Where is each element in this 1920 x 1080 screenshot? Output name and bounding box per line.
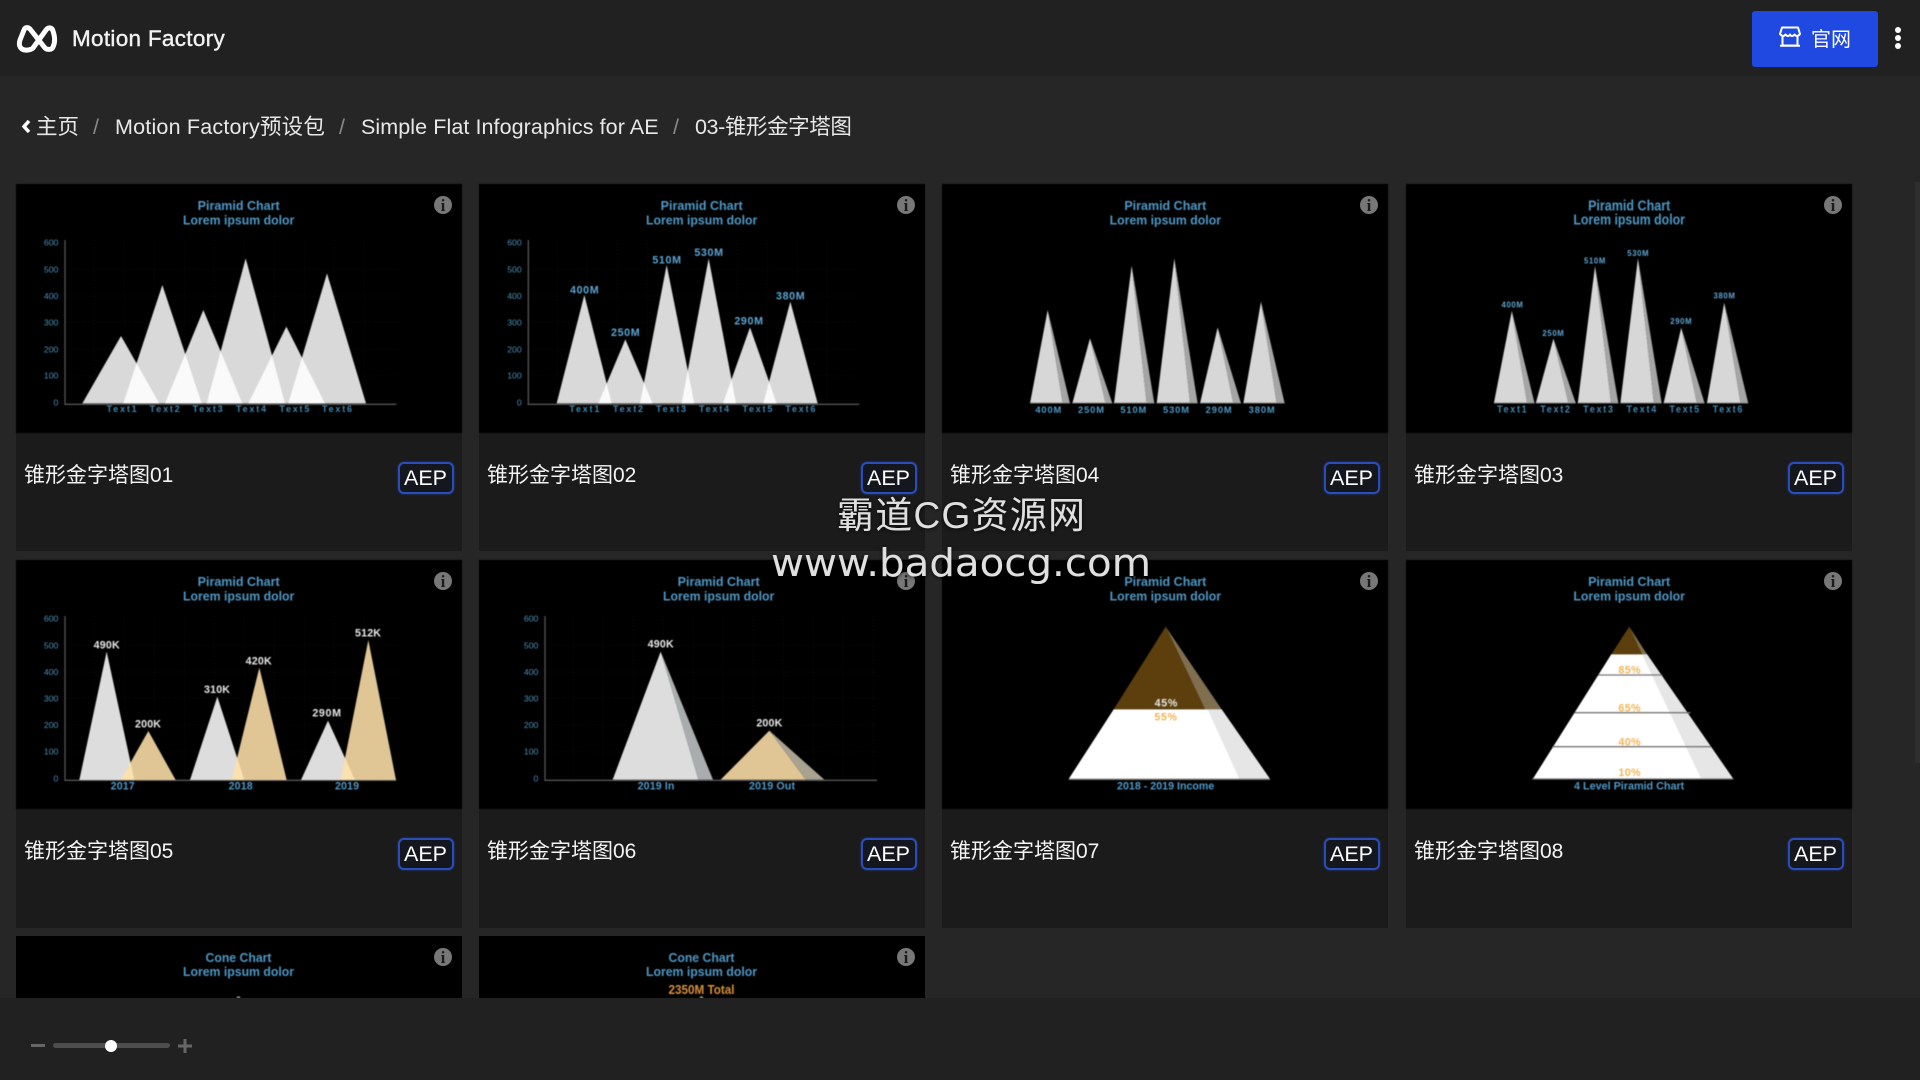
- chart: cones with values above and categories below: Text5: [1669, 403, 1699, 414]
- chart: overlapping pyramid chart 01: Piramid Chart: [198, 198, 280, 213]
- panel: card 04: [942, 184, 1388, 551]
- chart: two shaded pyramids: 490K: [648, 638, 674, 650]
- footer bar with zoom slider: [0, 998, 1920, 1080]
- chart: four-level pyramid: 10%: [1618, 767, 1641, 779]
- chart: two shaded pyramids: Piramid Chart: [678, 574, 760, 589]
- chart: paired pyramid chart by year: 200K: [135, 718, 161, 730]
- icon: back chevron: [22, 120, 30, 133]
- chart: overlapping pyramid chart 01: 500: [44, 264, 59, 274]
- badge: AEP: [1324, 462, 1380, 494]
- chart: paired pyramid chart by year: Lorem ipsum dolor: [183, 588, 294, 603]
- chart: pyramid chart 02 with values: 0: [517, 397, 522, 407]
- chart: cone chart heading with total: [646, 950, 758, 998]
- chart: pyramid chart 02 with values: 400M: [570, 284, 599, 296]
- chart: two-level pyramid income: [942, 560, 1388, 809]
- chart: two-level pyramid income: 2018 - 2019 Income: [1117, 780, 1214, 792]
- badge: AEP: [860, 838, 916, 870]
- chart: cones with values below: 510M: [1120, 405, 1147, 415]
- chart: overlapping pyramid chart 01: Text1: [107, 404, 137, 414]
- chart: pyramid chart 02 with values: 530M: [694, 247, 723, 259]
- chart: cone chart heading: Lorem ipsum dolor: [183, 964, 294, 979]
- separator: /: [93, 115, 99, 139]
- chart: paired pyramid chart by year: 2019: [335, 780, 359, 792]
- chart: overlapping pyramid chart 01: Text5: [279, 404, 309, 414]
- chart: cones with values above and categories below: Text6: [1713, 403, 1742, 414]
- chart: cones with values above and categories below: 250M: [1542, 329, 1564, 338]
- chart: cones with values below: 290M: [1206, 405, 1232, 415]
- badge: AEP: [860, 462, 916, 494]
- chart: two shaded pyramids: 200K: [756, 717, 783, 729]
- chart: paired pyramid chart by year: 290M: [312, 707, 341, 719]
- chart: overlapping pyramid chart 01: Text3: [193, 404, 223, 414]
- chart: cones with values above and categories below: Text3: [1583, 403, 1613, 414]
- crumb: infographics: Simple Flat Infographics for AE: [361, 115, 659, 139]
- card title: 锥形金字塔图07: [950, 840, 1099, 863]
- badge: AEP: [1788, 838, 1844, 870]
- panel: card 02: [479, 184, 925, 551]
- chart: two-level pyramid income: Lorem ipsum dolor: [1110, 588, 1221, 603]
- slider thumb: [105, 1040, 117, 1052]
- chart: two-level pyramid income: 55%: [1154, 711, 1178, 723]
- panel: card 10 (clipped): [479, 936, 925, 998]
- panel: card 09 (clipped): [16, 936, 462, 998]
- button label: 官网: [1811, 29, 1851, 51]
- chart: cones with values above and categories below: 290M: [1670, 317, 1692, 326]
- chart: four-level pyramid: 4 Level Piramid Chart: [1574, 780, 1685, 792]
- card title: 锥形金字塔图08: [1414, 840, 1563, 863]
- chart: two-level pyramid income: 45%: [1155, 697, 1178, 709]
- chart: paired pyramid chart by year: 2017: [111, 780, 135, 792]
- chart: pyramid chart 02 with values: 600: [507, 238, 522, 248]
- badge: AEP: AEP: [867, 466, 910, 490]
- icon: minus: [31, 1044, 45, 1047]
- chart: two shaded pyramids: 2019 In: [638, 780, 674, 792]
- icon: info: [1824, 572, 1842, 590]
- chart: paired pyramid chart by year: 420K: [246, 655, 272, 667]
- chart: pyramid chart 02 with values: 380M: [776, 290, 805, 302]
- brand name: Motion Factory: [72, 26, 225, 51]
- chart: pyramid chart 02 with values: Text4: [699, 404, 729, 414]
- icon: info: [1360, 196, 1378, 214]
- chart: cones with values below: Piramid Chart: [1124, 198, 1207, 213]
- panel: card 06: [479, 560, 925, 928]
- chart: paired pyramid chart by year: 490K: [94, 640, 120, 652]
- chart: two shaded pyramids: 2019 Out: [749, 780, 795, 792]
- chart: overlapping pyramid chart 01: 400: [44, 291, 59, 301]
- badge: AEP: [1324, 838, 1380, 870]
- chart: paired pyramid chart by year: [16, 560, 462, 809]
- chart: cones with values above and categories below: Text1: [1497, 403, 1527, 414]
- chart: cones with values below: 250M: [1078, 405, 1104, 415]
- chart: two shaded pyramids: 100: [524, 747, 539, 757]
- icon: info: [897, 948, 915, 966]
- badge: AEP: AEP: [1330, 842, 1373, 866]
- chart: overlapping pyramid chart 01: Text2: [150, 404, 180, 414]
- badge: AEP: [398, 462, 454, 494]
- chart: four-level pyramid: Piramid Chart: [1588, 574, 1671, 589]
- chart: pyramid chart 02 with values: [479, 184, 925, 433]
- chart: cones with values below: 380M: [1249, 405, 1275, 415]
- chart: paired pyramid chart by year: 512K: [355, 628, 381, 640]
- card title: 锥形金字塔图06: [487, 840, 636, 863]
- chart: two shaded pyramids: 0: [534, 773, 539, 783]
- chart: pyramid chart 02 with values: 300: [507, 317, 522, 327]
- chart: cones with values above and categories below: 510M: [1584, 256, 1606, 265]
- chart: overlapping pyramid chart 01: 200: [44, 344, 59, 354]
- chart: pyramid chart 02 with values: 500: [507, 264, 522, 274]
- chart: pyramid chart 02 with values: Text2: [613, 404, 643, 414]
- chart: cones with values above and categories below: 400M: [1502, 300, 1523, 310]
- watermark: [771, 495, 1151, 585]
- crumb: current page: 03-锥形金字塔图: [695, 115, 851, 139]
- chart: four-level pyramid: 40%: [1618, 736, 1641, 748]
- chart: cones with values above and categories below: Lorem ipsum dolor: [1573, 211, 1685, 228]
- chart: cone chart heading with total: Lorem ipsum dolor: [646, 964, 757, 979]
- chart: four-level pyramid: [1406, 560, 1852, 809]
- card title: 锥形金字塔图04: [950, 464, 1099, 487]
- chart: pyramid chart 02 with values: Piramid Chart: [661, 198, 743, 213]
- chart: four-level pyramid: 85%: [1618, 664, 1641, 676]
- chart: paired pyramid chart by year: 310K: [204, 684, 230, 696]
- icon: plus: [178, 1039, 192, 1053]
- chart: two shaded pyramids: 600: [524, 614, 539, 624]
- icon: info: [1360, 572, 1378, 590]
- chart: pyramid chart 02 with values: Text5: [742, 404, 772, 414]
- panel: card 07: [942, 560, 1388, 928]
- chart: overlapping pyramid chart 01: Lorem ipsum dolor: [183, 212, 294, 227]
- scrollbar: [1915, 182, 1920, 763]
- separator: /: [673, 115, 679, 139]
- chart: cone chart heading: [183, 950, 295, 998]
- card title: 锥形金字塔图05: [24, 840, 173, 863]
- chart: two shaded pyramids: [479, 560, 925, 809]
- icon: Motion Factory logo: [16, 25, 58, 53]
- badge: AEP: AEP: [1330, 466, 1373, 490]
- header bar: [0, 0, 1920, 76]
- card title: 锥形金字塔图01: [24, 464, 173, 487]
- watermark: www.badaocg.com: [771, 541, 1151, 585]
- chart: cones with values above and categories below: 380M: [1714, 291, 1735, 301]
- chart: paired pyramid chart by year: 0: [54, 773, 59, 783]
- chart: cones with values above and categories below: Piramid Chart: [1588, 197, 1671, 214]
- icon: info: [897, 196, 915, 214]
- crumb: preset pack: Motion Factory预设包: [115, 115, 325, 139]
- chart: two shaded pyramids: 300: [524, 693, 539, 703]
- chart: cones with values below: 400M: [1035, 405, 1062, 415]
- chart: overlapping pyramid chart 01: 600: [44, 238, 59, 248]
- badge: AEP: AEP: [1794, 842, 1837, 866]
- crumb: home: 主页: [36, 115, 79, 139]
- chart: cones with values below: 530M: [1163, 405, 1189, 415]
- badge: AEP: AEP: [1794, 466, 1837, 490]
- chart: four-level pyramid: 65%: [1618, 702, 1641, 714]
- chart: paired pyramid chart by year: 300: [44, 693, 59, 703]
- badge: AEP: AEP: [404, 842, 447, 866]
- card title: 锥形金字塔图03: [1414, 464, 1563, 487]
- chart: four-level pyramid: Lorem ipsum dolor: [1573, 588, 1686, 603]
- chart: paired pyramid chart by year: 500: [44, 640, 59, 650]
- panel: card 08: [1406, 560, 1852, 928]
- chart: pyramid chart 02 with values: Text1: [569, 404, 599, 414]
- chart: two shaded pyramids: 500: [524, 640, 539, 650]
- chart: cones with values above and categories below: Text2: [1540, 403, 1570, 414]
- chart: pyramid chart 02 with values: 250M: [611, 327, 640, 339]
- chart: pyramid chart 02 with values: 510M: [652, 255, 681, 267]
- icon: info: [434, 948, 452, 966]
- chart: overlapping pyramid chart 01: Text4: [236, 404, 266, 414]
- chart: paired pyramid chart by year: 200: [44, 720, 59, 730]
- badge: AEP: AEP: [867, 842, 910, 866]
- breadcrumb: [22, 115, 851, 139]
- chart: overlapping pyramid chart 01: 0: [54, 397, 59, 407]
- icon: info: [434, 196, 452, 214]
- official site button: [1752, 11, 1878, 67]
- chart: cone chart heading with total: 2350M Total: [668, 983, 734, 997]
- panel: card 05: [16, 560, 462, 928]
- chart: two-level pyramid income: Piramid Chart: [1124, 574, 1207, 589]
- chart: overlapping pyramid chart 01: 100: [44, 371, 59, 381]
- chart: pyramid chart 02 with values: 100: [507, 371, 522, 381]
- icon: storefront: [1779, 26, 1801, 47]
- chart: cones with values above and categories below: 530M: [1627, 249, 1649, 258]
- icon: info: [1824, 196, 1842, 214]
- chart: cone chart heading: Cone Chart: [206, 950, 272, 965]
- chart: pyramid chart 02 with values: 290M: [734, 315, 763, 327]
- chart: pyramid chart 02 with values: Text3: [656, 404, 686, 414]
- chart: cones with values below: Lorem ipsum dolor: [1110, 212, 1221, 227]
- card title: 锥形金字塔图02: [487, 464, 636, 487]
- slider track: [53, 1043, 170, 1048]
- chart: pyramid chart 02 with values: 200: [507, 344, 522, 354]
- chart: cones with values above and categories below: Text4: [1626, 403, 1657, 414]
- chart: cones with values below: [942, 184, 1388, 433]
- chart: cones with values above and categories below: [1406, 184, 1852, 433]
- chart: paired pyramid chart by year: Piramid Chart: [198, 574, 280, 589]
- chart: paired pyramid chart by year: 2018: [229, 780, 253, 792]
- panel: card 03: [1406, 184, 1852, 551]
- chart: pyramid chart 02 with values: 400: [507, 291, 522, 301]
- chart: paired pyramid chart by year: 400: [44, 667, 59, 677]
- badge: AEP: [398, 838, 454, 870]
- badge: AEP: AEP: [404, 466, 447, 490]
- chart: pyramid chart 02 with values: Lorem ipsum dolor: [646, 212, 757, 227]
- chart: overlapping pyramid chart 01: 300: [44, 317, 59, 327]
- badge: AEP: [1788, 462, 1844, 494]
- chart: paired pyramid chart by year: 100: [44, 747, 59, 757]
- chart: overlapping pyramid chart 01: Text6: [322, 404, 352, 414]
- icon: info: [897, 572, 915, 590]
- chart: cone chart heading with total: Cone Chart: [668, 950, 735, 965]
- chart: paired pyramid chart by year: 600: [44, 614, 59, 624]
- icon: more menu: [1895, 27, 1901, 49]
- panel: card 01: [16, 184, 462, 551]
- chart: overlapping pyramid chart 01: [16, 184, 462, 433]
- watermark: 霸道CG资源网: [837, 495, 1085, 536]
- chart: two shaded pyramids: 200: [524, 720, 539, 730]
- chart: pyramid chart 02 with values: Text6: [785, 404, 815, 414]
- icon: info: [434, 572, 452, 590]
- chart: two shaded pyramids: 400: [524, 667, 539, 677]
- separator: /: [339, 115, 345, 139]
- chart: two shaded pyramids: Lorem ipsum dolor: [663, 588, 774, 603]
